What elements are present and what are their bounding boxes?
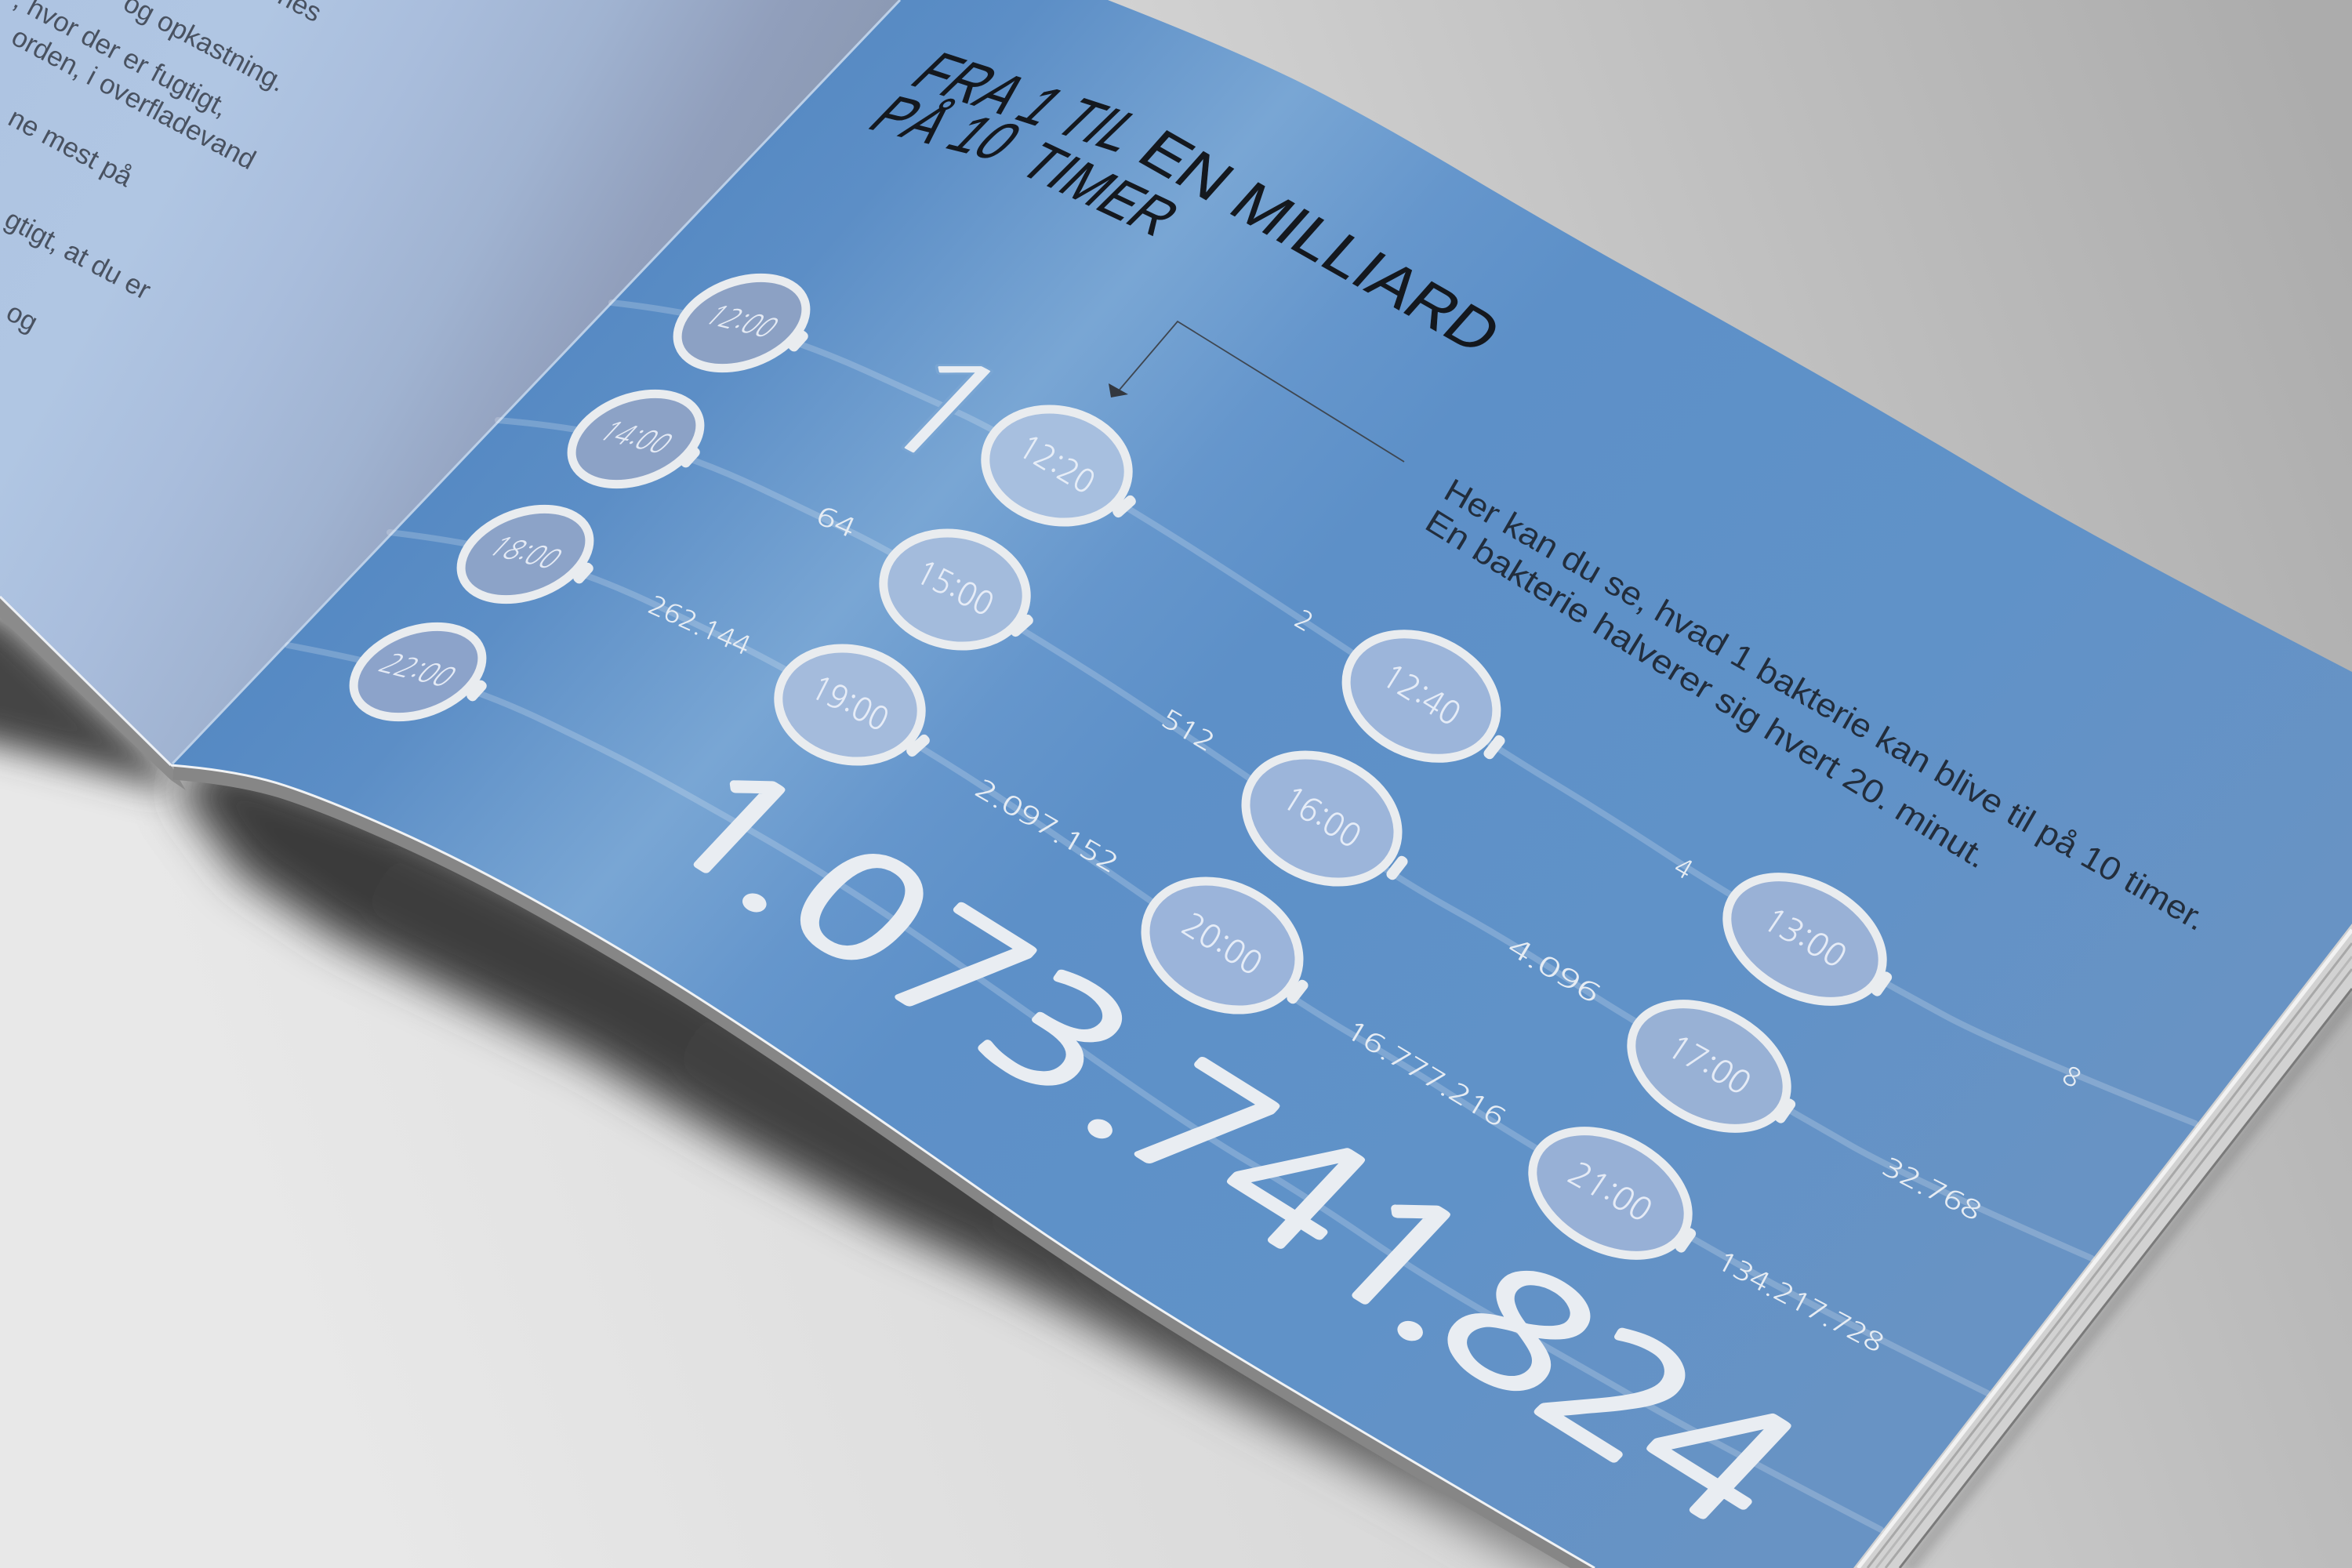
count labels along the rows: 4.096 (1504, 933, 1604, 1007)
clock 12:40: 12:40 (1377, 659, 1465, 731)
count labels along the rows: 2 (1290, 605, 1317, 636)
shadow under right page (176, 753, 1646, 1568)
clock 13:00: 13:00 (1757, 903, 1852, 973)
panel: left page (0, 0, 900, 765)
description text: En bakterie halverer sig hvert 20. minut. (1419, 503, 1994, 876)
count labels along the rows: 262.144 (644, 591, 754, 659)
count labels along the rows: 32.768 (1878, 1153, 1985, 1225)
big number: final count: 7 (1094, 1038, 1304, 1217)
clock 17:00 (1610, 978, 1808, 1154)
big number: final count: . (1367, 1212, 1530, 1364)
big number: final count: 4 (1605, 1360, 1829, 1552)
count labels along the rows: 8 (2058, 1062, 2085, 1092)
clock 19:00: 19:00 (806, 671, 893, 737)
left page body text fragments (0, 0, 327, 338)
clock 13:00 (1706, 851, 1904, 1027)
clock 21:00: 21:00 (1563, 1157, 1657, 1227)
count labels along the rows: 16.777.216 (1341, 1016, 1509, 1131)
big number: final count: 3 (952, 946, 1160, 1123)
left page body text fragments: orden, i overfladevand (6, 21, 261, 176)
page edge highlight (171, 765, 1595, 1568)
big number: final count: . (713, 793, 866, 934)
number: start count 1: 1 (833, 325, 1047, 493)
left page body text fragments: gtigt, at du er (0, 204, 156, 306)
arrow from description to first doubling (1109, 321, 1404, 462)
page stack: bottom edge of right page (173, 773, 1597, 1568)
left page body text fragments: og (2, 296, 43, 338)
clock 20:00 (1124, 857, 1320, 1034)
count labels along the rows: 4 (1670, 853, 1697, 884)
row lines connecting the clocks (288, 303, 2195, 1530)
clock 16:00 (1225, 731, 1419, 906)
clock 12:20 (975, 396, 1139, 535)
title: PÅ 10 (855, 86, 1036, 171)
title: FRA 1 TIL (896, 42, 1160, 162)
count labels along the rows (644, 502, 2085, 1356)
count labels along the rows: 512 (1157, 705, 1219, 756)
clock 16:00: 16:00 (1277, 781, 1366, 854)
clock 12:40 (1326, 611, 1517, 782)
title (855, 42, 1515, 365)
spine highlight (172, 0, 900, 764)
clock 22:00: 22:00 (373, 650, 463, 691)
clock 21:00 (1512, 1105, 1709, 1281)
count labels along the rows: 134.217.728 (1713, 1247, 1888, 1356)
title: TIMER (1006, 132, 1193, 246)
clock 18:00 (448, 492, 602, 616)
count labels along the rows: 2.097.152 (971, 775, 1123, 877)
page stack: right edge of brochure (1853, 924, 2352, 1568)
shadow beside right stack (1905, 994, 2352, 1568)
clock 17:00: 17:00 (1661, 1030, 1756, 1100)
big number: final count: 4 (1187, 1098, 1400, 1280)
clock 20:00: 20:00 (1177, 908, 1267, 982)
title: EN MILLIARD (1126, 118, 1515, 365)
count labels along the rows: 64 (813, 502, 859, 542)
big number: final count: 0 (759, 822, 960, 994)
description text: Her kan du se, hvad 1 bakterie kan blive til på 10 timer. (1439, 471, 2212, 938)
clock 14:00: 14:00 (593, 417, 679, 458)
big number: final count: 8 (1408, 1239, 1626, 1425)
shadow under left page (0, 604, 171, 789)
big number: final count: 1 (1287, 1161, 1502, 1345)
big number: final count: 2 (1508, 1301, 1729, 1490)
clock 12:00 (665, 261, 818, 385)
left page body text fragments: ne mest på (3, 102, 138, 193)
clock 12:00: 12:00 (699, 301, 785, 342)
clock 22:00 (341, 610, 495, 734)
clock 12:20: 12:20 (1013, 430, 1100, 500)
clock 18:00: 18:00 (482, 532, 568, 573)
big number: final count: . (1058, 1014, 1216, 1161)
page stack: left page edge (0, 597, 186, 790)
clock 14:00 (559, 377, 713, 501)
clock 15:00 (873, 520, 1037, 659)
clock 19:00 (768, 635, 932, 775)
big number: final count: 1 (633, 741, 832, 911)
clock 15:00: 15:00 (911, 556, 998, 622)
big number: final count: 7 (855, 884, 1060, 1059)
